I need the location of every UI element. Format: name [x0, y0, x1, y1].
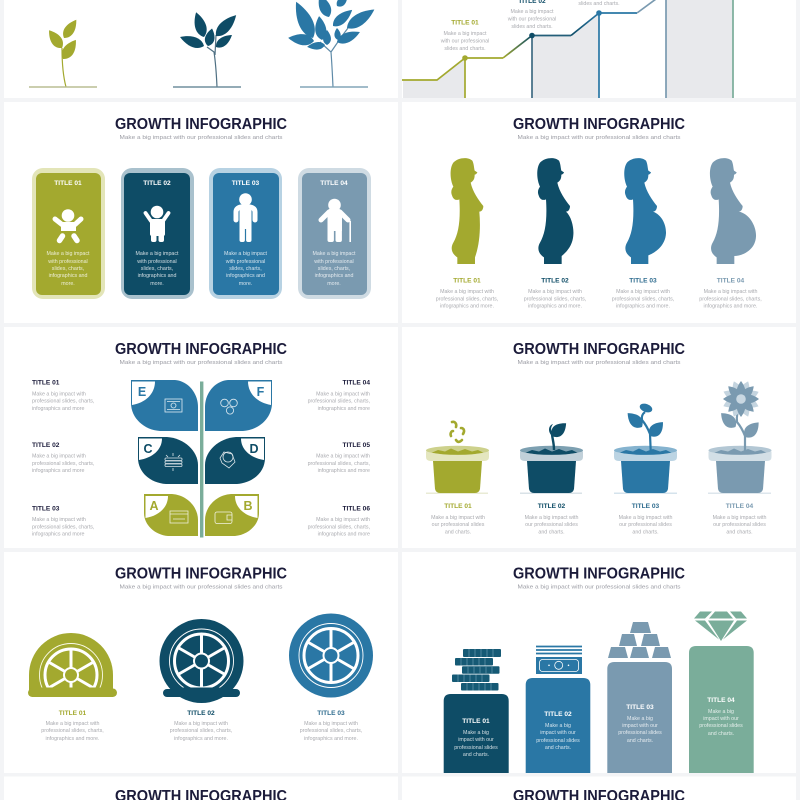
bar: title 01: impact with our	[458, 737, 494, 743]
stem	[200, 382, 203, 538]
icon: credit card	[170, 511, 188, 523]
card: title 03: slides, charts,	[229, 266, 262, 272]
card: title 02: with professional	[137, 259, 177, 265]
card: title 01: with professional	[48, 259, 88, 265]
silhouette: stage 04	[710, 158, 756, 264]
text: tyre 03	[300, 710, 362, 742]
card: title 01: infographics and	[49, 273, 87, 279]
icon: olive seedling	[29, 17, 97, 88]
card: title 04: TITLE 04	[320, 180, 348, 187]
bar: title 02: impact with our	[540, 730, 576, 736]
subheading: Make a big impact with our professional slides and charts	[518, 584, 681, 590]
text: title 05	[308, 442, 370, 474]
bar: title 04: Make a big	[708, 709, 734, 715]
text: pot 04: our professional slides	[713, 522, 766, 528]
text: pot 03: our professional slides	[619, 522, 672, 528]
icon: blue leafy plant	[288, 0, 378, 88]
bar: title 02: Make a big	[545, 723, 571, 729]
text: pot 01	[431, 503, 485, 536]
heading: GROWTH INFOGRAPHIC	[513, 566, 685, 582]
card: title 02: TITLE 02	[143, 180, 171, 187]
panel: plant growth stages	[4, 0, 398, 98]
text: pot 03: TITLE 03	[632, 503, 660, 510]
card: title 02: more.	[150, 281, 164, 287]
text: pot 03	[619, 503, 672, 536]
text: stage 02: Make a big impact with	[528, 289, 582, 295]
heading: GROWTH INFOGRAPHIC	[513, 341, 685, 358]
panel: pregnancy silhouettes	[402, 102, 796, 323]
card: title 04: slides, charts,	[318, 266, 350, 272]
text: tyre 03: Make a big impact with	[304, 721, 358, 727]
card: title 03: with professional	[226, 259, 265, 265]
card: title 04: with professional	[314, 259, 354, 265]
text: step 01	[441, 20, 489, 52]
text: title 06	[308, 506, 370, 538]
text: stage 01: Make a big impact with	[440, 289, 494, 295]
leaf: E: E	[138, 385, 146, 399]
text: title 05: Make a big impact with	[316, 454, 370, 460]
icon: piggy hand	[220, 452, 235, 468]
text: tyre 02: professional slides, charts,	[170, 728, 232, 734]
bar: title 03: professional slides	[618, 730, 662, 736]
card: title 02: infographics and	[138, 273, 176, 279]
text: title 03: Make a big impact with	[32, 517, 86, 523]
text: pot 02: and charts.	[538, 530, 565, 536]
text: tyre 03: infographics and more.	[304, 736, 358, 742]
icon: banknote	[165, 399, 182, 412]
text: stage 04: professional slides, charts,	[699, 296, 762, 302]
bar: title 01: professional slides	[454, 745, 498, 751]
text: stage 03	[612, 278, 674, 310]
card: title 03	[209, 168, 282, 299]
text: step 01: TITLE 01	[451, 20, 479, 26]
icon: adult	[236, 193, 255, 242]
text: pot 02: TITLE 02	[538, 503, 566, 510]
text: stage 04: TITLE 04	[717, 278, 745, 284]
heading: GROWTH INFOGRAPHIC	[115, 341, 287, 358]
text: tyre 02	[170, 710, 232, 742]
bar: title 02: TITLE 02	[544, 711, 572, 718]
panel: rising step line chart	[402, 0, 796, 98]
panel: life stages cards	[4, 102, 398, 323]
leaf: A: A	[149, 499, 159, 513]
text: tyre 03: TITLE 03	[317, 710, 345, 717]
text: stage 01: TITLE 01	[453, 278, 481, 284]
chart: step line	[402, 0, 733, 98]
subheading: Make a big impact with our professional slides and charts	[518, 360, 681, 366]
card: title 04: more.	[327, 281, 341, 287]
chart: step markers	[462, 10, 602, 61]
icon: coins	[165, 453, 182, 471]
text: stage 04	[699, 278, 762, 310]
text: stage 01	[436, 278, 498, 310]
pot: flower	[708, 379, 772, 494]
text: title 05: infographics and more	[318, 468, 370, 474]
text: pot 04: and charts.	[726, 530, 753, 536]
bar: title 03: impact with our	[622, 723, 658, 729]
icon: gears	[221, 399, 237, 414]
text: title 04: professional slides, charts,	[308, 398, 370, 404]
text: title 01	[32, 380, 94, 412]
panel: tyres	[4, 552, 398, 773]
bar: title 01: Make a big	[463, 730, 489, 736]
bar: title 04: TITLE 04	[707, 697, 735, 704]
text: stage 01: professional slides, charts,	[436, 296, 498, 302]
text: pot 02: Make a big impact with	[525, 515, 578, 521]
text: title 03	[32, 506, 94, 538]
text: title 02	[32, 442, 94, 474]
card: title 03: TITLE 03	[232, 180, 260, 187]
text: title 04: infographics and more	[318, 406, 370, 412]
text: step 03: slides and charts.	[578, 1, 620, 7]
icon: wallet	[215, 512, 232, 524]
text: stage 03: infographics and more.	[616, 304, 670, 310]
icon: coin stacks	[452, 649, 501, 690]
text: title 03: professional slides, charts,	[32, 524, 94, 530]
card: title 01: more.	[61, 281, 75, 287]
card: title 01: slides, charts,	[52, 266, 84, 272]
text: title 01: professional slides, charts,	[32, 398, 94, 404]
text: stage 02: infographics and more.	[528, 304, 582, 310]
text: pot 03: and charts.	[632, 530, 659, 536]
heading: GROWTH INFOGRAPHIC	[115, 566, 287, 582]
text: tyre 01: Make a big impact with	[46, 721, 99, 727]
bar: title 01: TITLE 01	[462, 718, 490, 725]
card: title 03: infographics and	[226, 273, 265, 279]
text: step 02	[508, 0, 556, 30]
card: title 01	[32, 168, 105, 299]
card: title 01: TITLE 01	[54, 180, 82, 187]
text: step 02: Make a big impact	[511, 9, 554, 15]
pot: seeds	[426, 422, 489, 494]
subheading: Make a big impact with our professional slides and charts	[120, 135, 283, 141]
text: step 01: with our professional	[441, 38, 489, 44]
icon: child	[146, 206, 168, 242]
bar: title 04: and charts.	[708, 731, 734, 737]
bar: title 01	[444, 694, 509, 773]
bar: title 01: and charts.	[463, 752, 489, 758]
card: title 02: slides, charts,	[141, 266, 173, 272]
text: tyre 02: infographics and more.	[174, 736, 228, 742]
text: pot 04	[713, 503, 766, 536]
silhouette: stage 02	[537, 158, 573, 264]
chart: shaded areas	[403, 0, 733, 98]
card: title 02	[121, 168, 194, 299]
text: tyre 01: professional slides, charts,	[41, 728, 104, 734]
text: step 02: with our professional	[508, 16, 556, 22]
text: pot 03: Make a big impact with	[619, 515, 672, 521]
text: title 01: Make a big impact with	[32, 392, 86, 398]
text: stage 02: professional slides, charts,	[524, 296, 586, 302]
text: title 03: TITLE 03	[32, 506, 60, 512]
panel: wealth bars	[402, 552, 796, 773]
leaf: B	[205, 494, 259, 536]
text: title 01: TITLE 01	[32, 380, 60, 386]
text: title 02: TITLE 02	[32, 442, 60, 449]
leaf: A	[144, 494, 198, 536]
leaf: F: F	[257, 385, 265, 399]
subheading: Make a big impact with our professional slides and charts	[120, 584, 283, 590]
card: title 03: more.	[239, 281, 252, 287]
leaf: C	[138, 437, 198, 484]
card: title 02: Make a big impact	[136, 251, 179, 257]
text: stage 01: infographics and more.	[440, 304, 494, 310]
text: title 05: TITLE 05	[343, 442, 370, 449]
bar: title 02: and charts.	[545, 745, 571, 751]
text: pot 01: Make a big impact with	[431, 515, 485, 521]
icon: flat tyre	[28, 633, 117, 697]
bar: title 03: TITLE 03	[626, 704, 654, 711]
text: pot 02: our professional slides	[525, 522, 578, 528]
text: title 02: professional slides, charts,	[32, 461, 94, 467]
text: tyre 01: TITLE 01	[59, 710, 87, 717]
bar: title 04: impact with our	[703, 716, 739, 722]
text: stage 04: infographics and more.	[704, 304, 757, 310]
panel: cropped slide bottom left	[4, 776, 398, 800]
card: title 01: Make a big impact	[47, 251, 90, 257]
text: step 01: slides and charts.	[444, 46, 486, 52]
text: pot 02	[525, 503, 578, 536]
bar: title 03: and charts.	[627, 738, 653, 744]
text: stage 03: Make a big impact with	[616, 289, 670, 295]
bar: title 04: professional slides	[699, 723, 743, 729]
text: tyre 02: TITLE 02	[187, 710, 215, 717]
text: pot 01: TITLE 01	[444, 503, 472, 510]
pot: sprout	[520, 419, 583, 494]
silhouette: stage 03	[624, 158, 666, 264]
bar: title 02: professional slides	[536, 738, 580, 744]
text: stage 03: TITLE 03	[629, 278, 657, 284]
text: pot 01: our professional slides	[432, 522, 485, 528]
text: title 02: Make a big impact with	[32, 454, 86, 460]
bar: title 03	[607, 662, 672, 773]
card: title 03: Make a big impact	[224, 251, 268, 257]
bar: title 03: Make a big	[627, 716, 653, 722]
silhouette: stage 01	[451, 158, 483, 264]
bar: title 02	[526, 678, 590, 773]
panel: leaf diagram	[4, 327, 398, 548]
text: pot 01: and charts.	[445, 530, 471, 536]
text: pot 04: TITLE 04	[726, 503, 754, 510]
panel: cropped slide bottom right	[402, 776, 796, 800]
icon: gold bars	[608, 622, 671, 658]
icon: dark sapling	[173, 11, 241, 88]
leaf: B: B	[243, 499, 253, 513]
text: title 04: TITLE 04	[343, 380, 370, 386]
leaf: D	[205, 437, 265, 484]
text: title 04: Make a big impact with	[316, 392, 370, 398]
text: step 02: slides and charts.	[511, 24, 553, 30]
heading: GROWTH INFOGRAPHIC	[115, 116, 287, 133]
pot: young plant	[614, 402, 677, 494]
icon: diamond	[694, 612, 747, 641]
bar: title 04	[689, 646, 754, 773]
text: title 06: infographics and more	[318, 532, 370, 538]
leaf: D: D	[249, 442, 259, 456]
icon: baby	[55, 209, 81, 240]
text: title 01: infographics and more	[32, 406, 84, 412]
text: stage 03: professional slides, charts,	[612, 296, 674, 302]
subheading: Make a big impact with our professional slides and charts	[120, 360, 283, 366]
leaf: C: C	[143, 442, 153, 456]
text: title 06: Make a big impact with	[316, 517, 370, 523]
text: tyre 01	[41, 710, 104, 742]
text: pot 04: Make a big impact with	[713, 515, 766, 521]
text: stage 04: Make a big impact with	[704, 289, 757, 295]
text: title 02: infographics and more	[32, 468, 84, 474]
icon: elder with cane	[321, 199, 351, 242]
card: title 04	[298, 168, 371, 299]
icon: cash stack	[536, 646, 582, 674]
card: title 04: infographics and	[315, 273, 353, 279]
card: title 04: Make a big impact	[313, 251, 356, 257]
icon: low tyre	[160, 619, 244, 703]
icon: full tyre	[289, 614, 373, 698]
text: title 04	[308, 380, 370, 412]
heading: GROWTH INFOGRAPHIC	[513, 116, 685, 133]
text: title 03: infographics and more	[32, 532, 84, 538]
text: title 06: TITLE 06	[343, 506, 370, 512]
subheading: Make a big impact with our professional slides and charts	[518, 135, 681, 141]
text: stage 02	[524, 278, 586, 310]
text: tyre 03: professional slides, charts,	[300, 728, 362, 734]
text: tyre 01: infographics and more.	[46, 736, 99, 742]
panel: flower pots	[402, 327, 796, 548]
icon: flower stem and head	[717, 379, 763, 451]
text: title 05: professional slides, charts,	[308, 461, 370, 467]
leaf: E	[131, 380, 198, 431]
leaf: F	[205, 380, 272, 431]
text: step 01: Make a big impact	[444, 31, 487, 37]
text: tyre 02: Make a big impact with	[174, 721, 228, 727]
text: stage 02: TITLE 02	[541, 278, 569, 284]
text: title 06: professional slides, charts,	[308, 524, 370, 530]
